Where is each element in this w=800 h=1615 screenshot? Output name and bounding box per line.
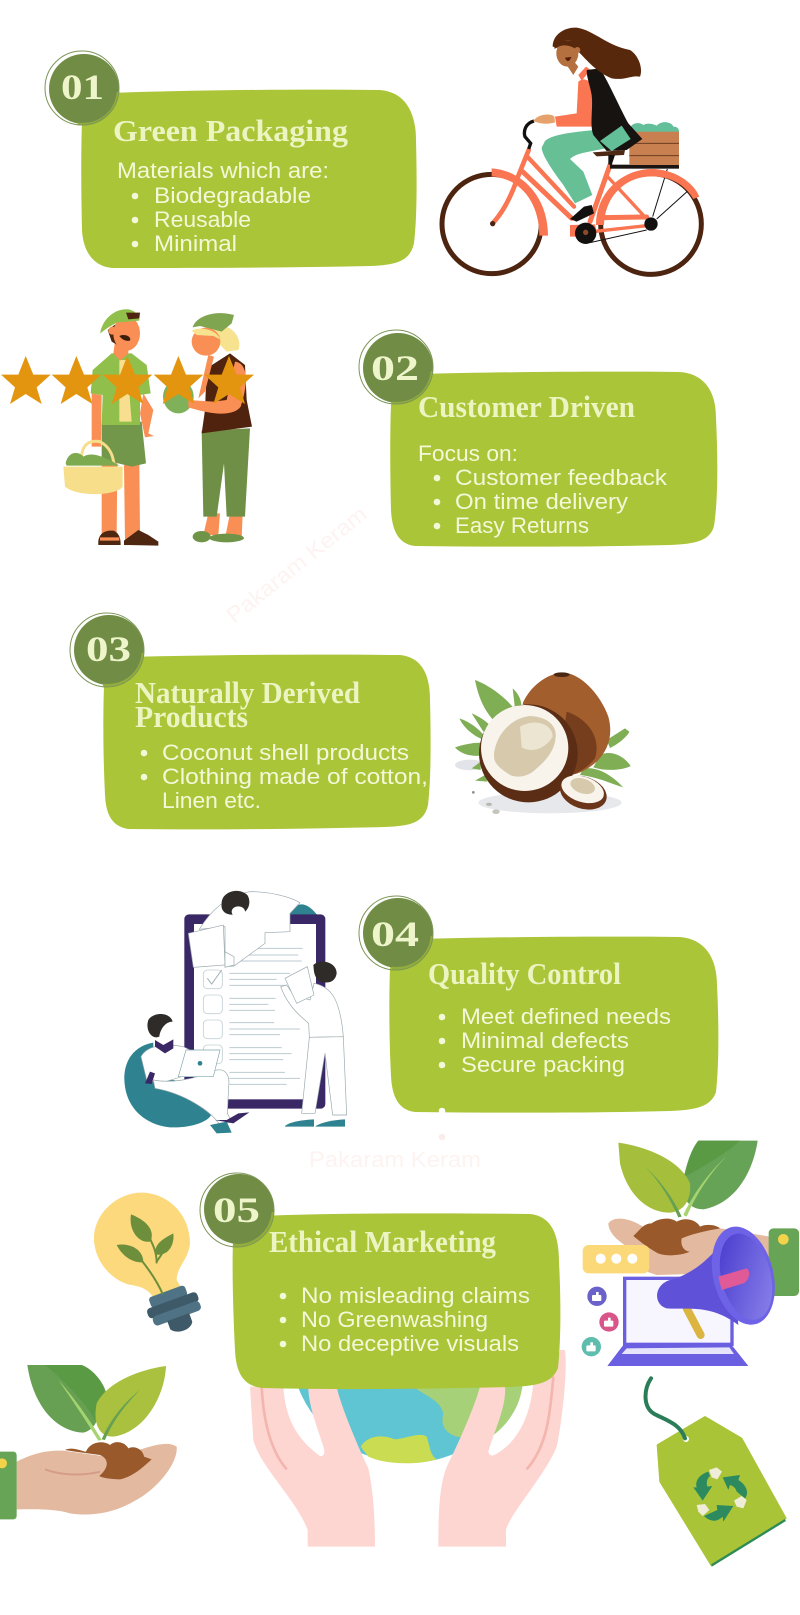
panel: 04 quality control: [359, 896, 718, 1140]
body list: On time delivery: [455, 489, 628, 514]
man: [91, 309, 158, 546]
body list: [418, 441, 668, 538]
body list: Minimal defects: [461, 1028, 629, 1053]
illustration: recycle tag: [646, 1378, 786, 1566]
hand and soil: [608, 1219, 799, 1296]
card background: [103, 655, 431, 829]
card background: [81, 90, 417, 268]
body list: Meet defined needs: [461, 1004, 671, 1029]
heading: Green Packaging: [113, 113, 349, 148]
illustration: hands holding globe: [250, 1227, 566, 1547]
card background: [389, 937, 718, 1113]
body list: [117, 158, 329, 256]
heading: Naturally Derived: [135, 675, 360, 710]
stars: [1, 356, 254, 404]
clipboard: [184, 914, 325, 1109]
heading: Products: [135, 699, 248, 734]
body list: Biodegradable: [154, 183, 311, 208]
number badge: [359, 330, 433, 404]
illustration: woman riding bicycle: [442, 28, 701, 274]
body list: Materials which are:: [117, 158, 329, 183]
body list: Coconut shell products: [162, 740, 409, 765]
like icons: [582, 1287, 619, 1356]
illustration: hand holding sprout, bottom left: [0, 1365, 177, 1519]
watermark: horizontal: Pakaram Keram: [309, 1147, 481, 1172]
number badge: [359, 896, 433, 970]
body list: [141, 740, 428, 813]
recycle symbol: [693, 1467, 747, 1522]
number badge: 03: [86, 629, 131, 669]
illustration: customers with five star rating: [1, 309, 254, 546]
number badge: [200, 1173, 274, 1247]
body list: No deceptive visuals: [301, 1331, 519, 1356]
card background: [233, 1213, 560, 1389]
leaves: [618, 1141, 758, 1217]
laptop: [607, 1278, 748, 1366]
body list: Secure packing: [461, 1052, 625, 1077]
standing person: [281, 962, 347, 1127]
illustration: coconut: [455, 672, 631, 815]
card background: [390, 372, 717, 547]
basket: [63, 441, 123, 494]
icon: light bulb with sprout: [94, 1193, 207, 1340]
panel: 01 green packaging: [45, 51, 417, 268]
body list: No misleading claims: [301, 1283, 530, 1308]
heading: Customer Driven: [418, 389, 635, 424]
body list: [439, 1004, 671, 1140]
heading: [135, 675, 360, 734]
top person: [188, 891, 300, 967]
illustration: team with checklist: [124, 891, 347, 1133]
watermark: diagonal: Pakaram Keram: [222, 501, 372, 628]
body list: [280, 1283, 530, 1356]
number badge: 02: [371, 348, 419, 388]
panel: 03 naturally derived products: [70, 613, 431, 829]
illustration: plant, laptop and megaphone, right: [582, 1141, 799, 1366]
seated person on bean bag: [124, 1014, 249, 1133]
body list: Easy Returns: [455, 513, 589, 538]
body list: Clothing made of cotton,: [162, 764, 428, 789]
number badge: [70, 613, 144, 687]
body list: Reusable: [154, 207, 251, 232]
body list: Focus on:: [418, 441, 518, 466]
panel: 05 ethical marketing: [200, 1173, 560, 1389]
body list: No Greenwashing: [301, 1307, 488, 1332]
chat bubble: [583, 1245, 649, 1273]
woman: [163, 313, 252, 542]
body list: Linen etc.: [162, 788, 261, 813]
number badge: 01: [61, 67, 104, 107]
megaphone: [657, 1220, 785, 1335]
body list: Minimal: [154, 231, 237, 256]
number badge: 05: [213, 1190, 260, 1230]
body list: Customer feedback: [455, 465, 668, 490]
heading: Ethical Marketing: [269, 1224, 496, 1259]
heading: Quality Control: [428, 956, 621, 991]
panel: 02 customer driven: [359, 330, 717, 547]
number badge: 04: [371, 914, 419, 954]
number badge: [45, 51, 119, 125]
